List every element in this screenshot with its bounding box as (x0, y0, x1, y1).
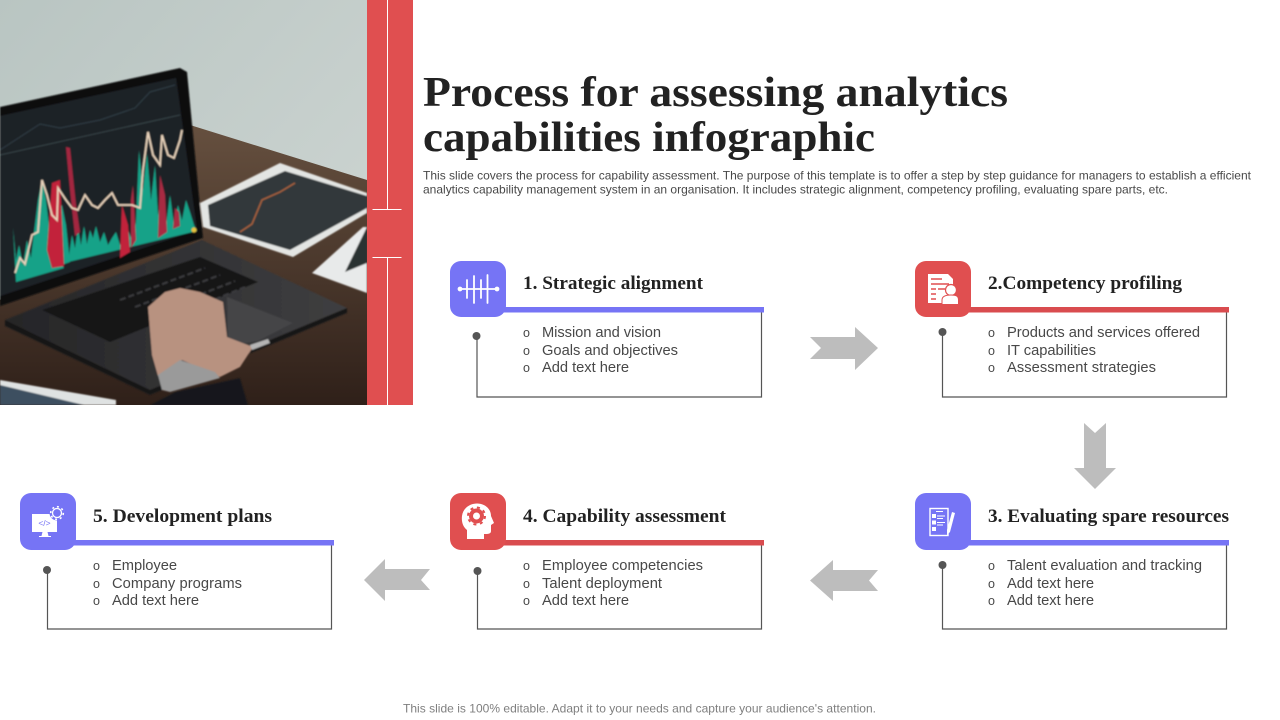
panel: 2. Competency profiling: o (988, 361, 995, 375)
panel: 2. Competency profiling: o (988, 344, 995, 358)
footer note: This slide is 100% editable. Adapt it to your needs and capture your audience's attention. (403, 702, 876, 716)
panel: 2. Competency profiling: Assessment strategies (1007, 360, 1156, 376)
panel: 1. Strategic alignment: Goals and objectives (542, 343, 678, 359)
icon: document and person (928, 274, 958, 304)
panel: 3. Evaluating spare resources: Add text here (1007, 593, 1094, 609)
panel: 1. Strategic alignment: 1. Strategic alignment (523, 274, 704, 294)
red decorative strip (367, 0, 413, 405)
panel: 3. Evaluating spare resources: 3. Evaluating spare resources (988, 507, 1229, 527)
panel: 1. Strategic alignment: o (523, 326, 530, 340)
panel: 2. Competency profiling: IT capabilities (1007, 343, 1096, 359)
panel: 3. Evaluating spare resources: o (988, 559, 995, 573)
panel: 5. Development plans: Employee (112, 558, 177, 574)
panel: 4. Capability assessment: Add text here (542, 593, 629, 609)
panel: 5. Development plans: o (93, 594, 100, 608)
panel: 3. Evaluating spare resources: Talent evaluation and tracking (1007, 558, 1202, 574)
icon: monitor with code and gear: </> (38, 518, 51, 528)
panel: 2. Competency profiling (915, 261, 1229, 397)
panel: 5. Development plans: 5. Development plans (93, 507, 272, 527)
panel: 2. Competency profiling: Products and services offered (1007, 325, 1200, 341)
panel: 1. Strategic alignment: o (523, 361, 530, 375)
arrow: step 4 to step 5 (364, 559, 430, 601)
panel: 2. Competency profiling: o (988, 326, 995, 340)
panel: 4. Capability assessment (450, 493, 764, 629)
panel: 5. Development plans: Company programs (112, 576, 242, 592)
title: Process for assessing analytics (423, 70, 1008, 116)
panel: 1. Strategic alignment (450, 261, 764, 397)
panel: 3. Evaluating spare resources: Add text here (1007, 576, 1094, 592)
icon: head with gear (462, 504, 494, 539)
subtitle text block: This slide covers the process for capability assessment. The purpose of this template is to offer a step by step guidance for managers to establish a efficient (423, 168, 1252, 182)
panel: 2. Competency profiling: 2.Competency profiling (988, 274, 1183, 294)
panel: 1. Strategic alignment: o (523, 344, 530, 358)
subtitle text block: analytics capability management system in an organisation. It includes strategic alignment, competency profiling, evaluating spare parts, etc. (423, 182, 1168, 196)
panel: 4. Capability assessment: Talent deployment (542, 576, 662, 592)
panel: 5. Development plans (20, 493, 334, 629)
subtitle text block (423, 168, 1252, 196)
panel: 4. Capability assessment: o (523, 559, 530, 573)
panel: 5. Development plans: Add text here (112, 593, 199, 609)
panel: 4. Capability assessment: Employee competencies (542, 558, 703, 574)
panel: 3. Evaluating spare resources: o (988, 594, 995, 608)
panel: 1. Strategic alignment: Add text here (542, 360, 629, 376)
photo: laptop showing trading chart on a desk (0, 0, 367, 405)
arrow: step 3 to step 4 (810, 560, 878, 601)
arrow: step 1 to step 2 (810, 327, 878, 370)
title (423, 70, 1008, 161)
icon: monitor with code and gear (32, 506, 64, 536)
icon: checklist and pencil (930, 508, 955, 536)
panel: 3. Evaluating spare resources: o (988, 577, 995, 591)
arrow: step 2 to step 3 (1074, 423, 1116, 489)
icon: sound wave (458, 275, 498, 303)
title: capabilities infographic (423, 115, 875, 161)
panel: 5. Development plans: o (93, 577, 100, 591)
panel: 4. Capability assessment: o (523, 577, 530, 591)
panel: 1. Strategic alignment: Mission and vision (542, 325, 661, 341)
panel: 3. Evaluating spare resources (915, 493, 1229, 629)
panel: 4. Capability assessment: 4. Capability assessment (523, 507, 727, 527)
panel: 4. Capability assessment: o (523, 594, 530, 608)
panel: 5. Development plans: o (93, 559, 100, 573)
